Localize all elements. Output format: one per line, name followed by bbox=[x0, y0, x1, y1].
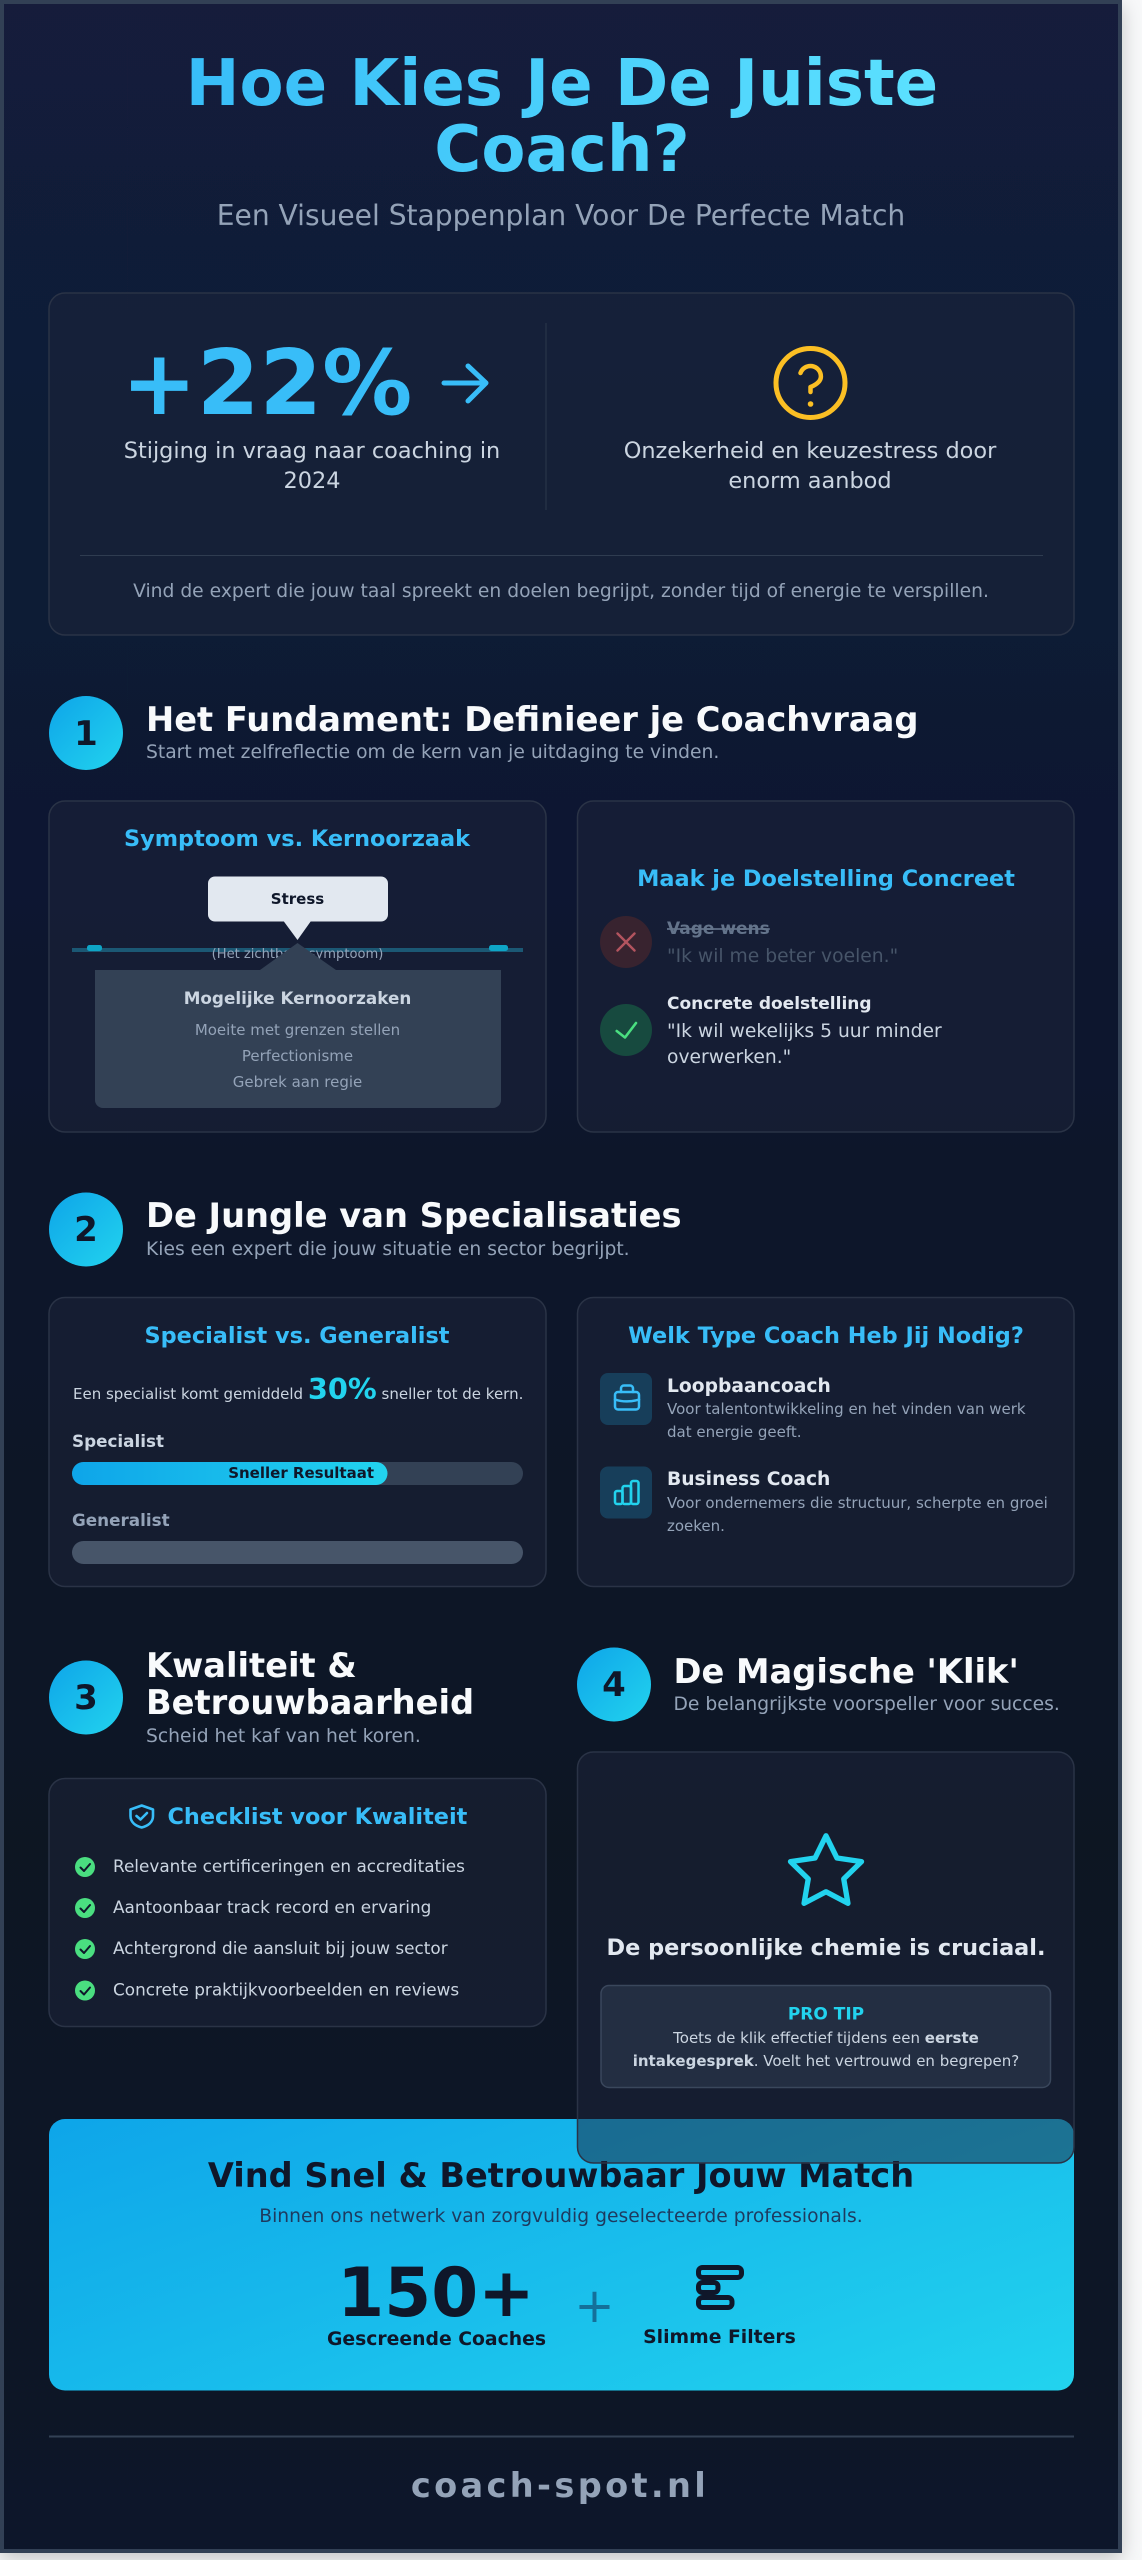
checklist items: Aantoonbaar track record en ervaring bbox=[113, 1897, 431, 1917]
section 4 heading: 4 bbox=[602, 1665, 626, 1705]
pro tip box: intakegesprek. Voelt het vertrouwd en begrepen? bbox=[633, 2052, 1019, 2070]
statistic caption bbox=[124, 438, 500, 494]
bar: specialist: Specialist bbox=[72, 1431, 164, 1451]
section 2 heading: De Jungle van Specialisaties bbox=[146, 1196, 682, 1235]
icon: question mark bbox=[776, 348, 845, 418]
section 1 heading: Start met zelfreflectie om de kern van je uitdaging te vinden. bbox=[146, 742, 719, 763]
section 4 heading bbox=[577, 1648, 1060, 1722]
panel: doelstelling concreet: Maak je Doelstelling Concreet bbox=[637, 866, 1015, 892]
Business Coach text bbox=[667, 1469, 1048, 1535]
uncertainty caption: Onzekerheid en keuzestress door bbox=[624, 438, 997, 464]
uncertainty caption: enorm aanbod bbox=[728, 468, 892, 494]
icon: bar chart bbox=[600, 1466, 652, 1518]
label: slimme filters: Slimme Filters bbox=[643, 2327, 796, 2348]
pro tip box bbox=[601, 1986, 1050, 2088]
statistic: 150+ coaches: Gescreende Coaches bbox=[327, 2329, 546, 2350]
icon: star bbox=[790, 1836, 862, 1903]
icon: shield bbox=[130, 1806, 153, 1828]
call to action panel bbox=[49, 2119, 1074, 2390]
iceberg diagram bbox=[72, 876, 523, 1108]
section 4 heading: De Magische 'Klik' bbox=[674, 1652, 1019, 1691]
panel: specialist vs generalist: Specialist vs. Generalist bbox=[144, 1323, 450, 1349]
concrete goal text: overwerken." bbox=[667, 1047, 791, 1068]
icon: cross bbox=[600, 916, 652, 968]
statistic: +22%: +22% bbox=[122, 331, 412, 436]
panel: specialist vs generalist bbox=[49, 1298, 546, 1586]
subtitle: Een Visueel Stappenplan Voor De Perfecte Match bbox=[217, 199, 905, 232]
iceberg diagram: Perfectionisme bbox=[242, 1047, 353, 1065]
Loopbaancoach text: dat energie geeft. bbox=[667, 1423, 802, 1441]
icon: briefcase bbox=[600, 1373, 652, 1425]
bar: specialist: Sneller Resultaat bbox=[228, 1464, 374, 1482]
section 4 heading: De belangrijkste voorspeller voor succes. bbox=[674, 1694, 1060, 1715]
panel: doelstelling concreet bbox=[578, 801, 1074, 1132]
icon: check bbox=[600, 1004, 652, 1056]
vague wish text bbox=[667, 919, 898, 967]
panel: welk type coach bbox=[578, 1298, 1074, 1586]
section 2 heading bbox=[49, 1192, 682, 1266]
bar: generalist: Generalist bbox=[72, 1510, 170, 1530]
iceberg diagram: Gebrek aan regie bbox=[233, 1073, 362, 1091]
panel: intro statistics bbox=[49, 293, 1074, 635]
section 3 heading: 3 bbox=[74, 1678, 98, 1718]
section 2 heading: 2 bbox=[74, 1210, 98, 1250]
Loopbaancoach text bbox=[667, 1376, 1026, 1441]
Loopbaancoach text: Voor talentontwikkeling en het vinden van werk bbox=[667, 1400, 1026, 1418]
checklist items: Achtergrond die aansluit bij jouw sector bbox=[113, 1938, 448, 1958]
panel: welk type coach: Welk Type Coach Heb Jij Nodig? bbox=[628, 1323, 1024, 1349]
checklist items: Relevante certificeringen en accreditaties bbox=[113, 1856, 465, 1876]
section 3 heading: Betrouwbaarheid bbox=[146, 1683, 474, 1722]
bar: specialist bbox=[72, 1431, 523, 1485]
panel: checklist bbox=[49, 1778, 546, 2026]
title bbox=[186, 46, 938, 187]
concrete goal text: Concrete doelstelling bbox=[667, 994, 872, 1014]
iceberg diagram: Moeite met grenzen stellen bbox=[195, 1021, 400, 1039]
section 1 heading bbox=[49, 696, 918, 770]
call to action panel: Binnen ons netwerk van zorgvuldig geselecteerde professionals. bbox=[259, 2206, 863, 2227]
section 1 heading: Het Fundament: Definieer je Coachvraag bbox=[146, 700, 918, 739]
concrete goal text: "Ik wil wekelijks 5 uur minder bbox=[667, 1021, 942, 1042]
panel: symptoom vs kernoorzaak bbox=[49, 801, 546, 1132]
uncertainty caption bbox=[624, 438, 997, 494]
bar: generalist bbox=[72, 1510, 523, 1564]
panel: de magische klik: De persoonlijke chemie is cruciaal. bbox=[607, 1935, 1045, 1961]
call to action panel: Vind Snel & Betrouwbaar Jouw Match bbox=[208, 2156, 914, 2195]
pro tip box: PRO TIP bbox=[788, 2004, 864, 2024]
Business Coach text: zoeken. bbox=[667, 1517, 725, 1535]
Business Coach text: Voor ondernemers die structuur, scherpte en groei bbox=[667, 1494, 1048, 1512]
statement with 30%: Een specialist komt gemiddeld 30% sneller tot de kern. bbox=[73, 1372, 523, 1406]
panel: checklist: Checklist voor Kwaliteit bbox=[168, 1804, 468, 1830]
title: Coach? bbox=[434, 112, 690, 187]
section 1 heading: 1 bbox=[74, 714, 98, 754]
statistic caption: Stijging in vraag naar coaching in bbox=[124, 438, 500, 464]
vague wish text: Vage wens bbox=[667, 919, 770, 939]
Loopbaancoach text: Loopbaancoach bbox=[667, 1376, 831, 1397]
iceberg diagram: Mogelijke Kernoorzaken bbox=[184, 988, 411, 1008]
panel: symptoom vs kernoorzaak: Symptoom vs. Kernoorzaak bbox=[124, 826, 471, 852]
icon: arrow right bbox=[444, 366, 486, 401]
icon: filters bbox=[698, 2268, 742, 2308]
plus sign: + bbox=[574, 2278, 615, 2334]
panel: de magische klik bbox=[578, 1752, 1074, 2163]
footer brand: coach-spot.nl bbox=[411, 2466, 709, 2505]
pro tip box: Toets de klik effectief tijdens een eerste bbox=[672, 2029, 979, 2047]
section 3 heading bbox=[49, 1646, 474, 1747]
vague wish text: "Ik wil me beter voelen." bbox=[667, 946, 898, 967]
iceberg diagram: (Het zichtbare symptoom) bbox=[212, 947, 383, 962]
concrete goal text bbox=[667, 994, 942, 1068]
checklist items bbox=[75, 1856, 465, 2000]
section 3 heading: Scheid het kaf van het koren. bbox=[146, 1726, 421, 1747]
section 3 heading: Kwaliteit & bbox=[146, 1646, 357, 1685]
checklist items: Concrete praktijkvoorbeelden en reviews bbox=[113, 1980, 459, 2000]
iceberg diagram: Stress bbox=[271, 890, 324, 908]
statistic caption: 2024 bbox=[284, 468, 340, 494]
section 2 heading: Kies een expert die jouw situatie en sector begrijpt. bbox=[146, 1239, 630, 1260]
intro summary: Vind de expert die jouw taal spreekt en doelen begrijpt, zonder tijd of energie te verspillen. bbox=[133, 581, 989, 602]
statistic: 150+ coaches: 150+ bbox=[337, 2253, 535, 2332]
title: Hoe Kies Je De Juiste bbox=[186, 46, 938, 121]
Business Coach text: Business Coach bbox=[667, 1469, 830, 1490]
